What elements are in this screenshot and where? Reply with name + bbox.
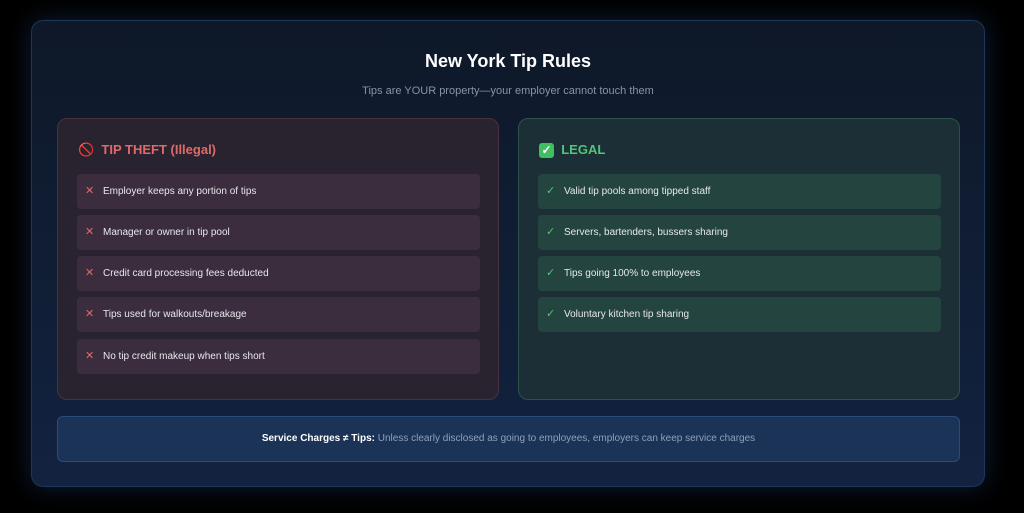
- item: [538, 297, 941, 332]
- callout: service charges: [57, 416, 960, 462]
- panel: tip theft: [57, 118, 499, 400]
- item: ✕: [85, 350, 94, 362]
- item: No tip credit makeup when tips short: [103, 351, 265, 362]
- item: [538, 215, 941, 250]
- item: Tips used for walkouts/breakage: [103, 309, 247, 320]
- item: [77, 215, 480, 250]
- item: ✓: [546, 226, 555, 238]
- item: ✕: [85, 308, 94, 320]
- item: Credit card processing fees deducted: [103, 268, 269, 279]
- item: ✓: [546, 308, 555, 320]
- callout: service charges: Service Charges ≠ Tips: Unless clearly disclosed as going to employees, employers can keep service charges: [262, 433, 755, 444]
- item: [77, 297, 480, 332]
- item: ✕: [85, 226, 94, 238]
- item: Voluntary kitchen tip sharing: [564, 309, 689, 320]
- heading: legal: [539, 142, 605, 158]
- panel: legal: [518, 118, 960, 400]
- item: Tips going 100% to employees: [564, 268, 700, 279]
- item: [538, 174, 941, 209]
- item: Valid tip pools among tipped staff: [564, 186, 710, 197]
- subtitle: Tips are YOUR property—your employer cannot touch them: [362, 85, 654, 97]
- item: Servers, bartenders, bussers sharing: [564, 227, 728, 238]
- item: [538, 256, 941, 291]
- title: New York Tip Rules: [425, 51, 591, 71]
- heading: tip theft: 🚫 TIP THEFT (Illegal): [78, 142, 216, 157]
- item: [77, 256, 480, 291]
- item: Manager or owner in tip pool: [103, 227, 230, 238]
- item: ✕: [85, 267, 94, 279]
- item: ✓: [546, 185, 555, 197]
- item: ✓: [546, 267, 555, 279]
- item: ✕: [85, 185, 94, 197]
- heading: legal: ✓: [541, 143, 552, 157]
- item: Employer keeps any portion of tips: [103, 186, 256, 197]
- heading: legal: LEGAL: [561, 142, 605, 157]
- item: [77, 174, 480, 209]
- item: [77, 339, 480, 374]
